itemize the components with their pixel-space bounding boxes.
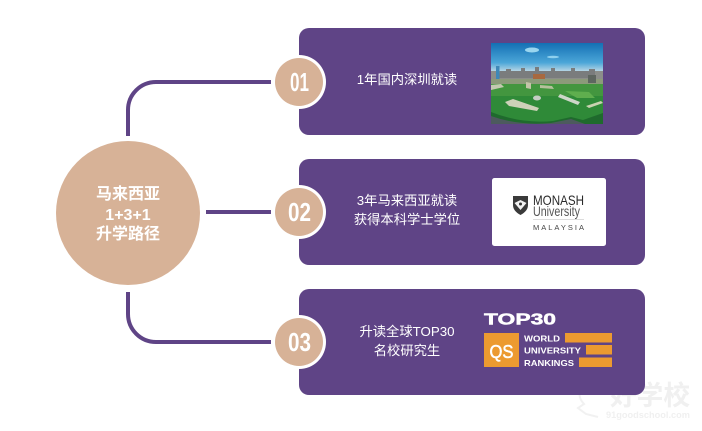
watermark: 好学校 — [610, 381, 690, 411]
Monash University logo card — [492, 178, 606, 246]
central circle: 升学路径 — [96, 224, 160, 243]
number badge 03: 03 — [288, 327, 311, 357]
step 3 text — [359, 323, 455, 358]
step 2 text — [354, 193, 460, 227]
connector: centre to step 3 — [128, 292, 271, 342]
watermark: 91goodschool.com — [606, 410, 690, 421]
Monash University logo card: MALAYSIA — [533, 223, 584, 232]
watermark — [578, 381, 690, 421]
connector: centre to step 1 — [128, 82, 271, 136]
Monash University logo card: MONASH — [533, 192, 584, 208]
central circle: 马来西亚 — [96, 185, 160, 203]
number badge 01 — [272, 55, 326, 109]
QS Top 30 logo: QS — [490, 342, 514, 362]
connector: centre to step 2 — [206, 210, 271, 214]
icon: Monash crest — [513, 196, 528, 215]
panel: step 2 — [299, 159, 645, 265]
photo: campus aerial view — [491, 43, 603, 124]
number badge 02 — [272, 185, 326, 239]
panel: step 1 — [299, 28, 645, 135]
number badge 02: 02 — [288, 197, 311, 227]
step 3 text: 升读全球TOP30 — [359, 323, 455, 339]
QS Top 30 logo: UNIVERSITY — [524, 346, 581, 356]
Monash University logo card: University — [533, 203, 580, 219]
QS Top 30 logo — [484, 312, 612, 368]
QS Top 30 logo: TOP30 — [484, 312, 556, 328]
number badge 01: 01 — [290, 67, 309, 97]
central circle: 1+3+1 — [105, 207, 151, 224]
panel: step 3 — [299, 289, 645, 395]
step 2 text: 3年马来西亚就读 — [357, 193, 457, 208]
step 1 text: 1年国内深圳就读 — [357, 72, 457, 87]
step 3 text: 名校研究生 — [374, 342, 440, 358]
QS Top 30 logo: RANKINGS — [524, 358, 574, 368]
central circle — [56, 141, 200, 285]
QS Top 30 logo: WORLD — [524, 334, 560, 344]
number badge 03 — [272, 315, 326, 369]
step 2 text: 获得本科学士学位 — [354, 211, 460, 227]
